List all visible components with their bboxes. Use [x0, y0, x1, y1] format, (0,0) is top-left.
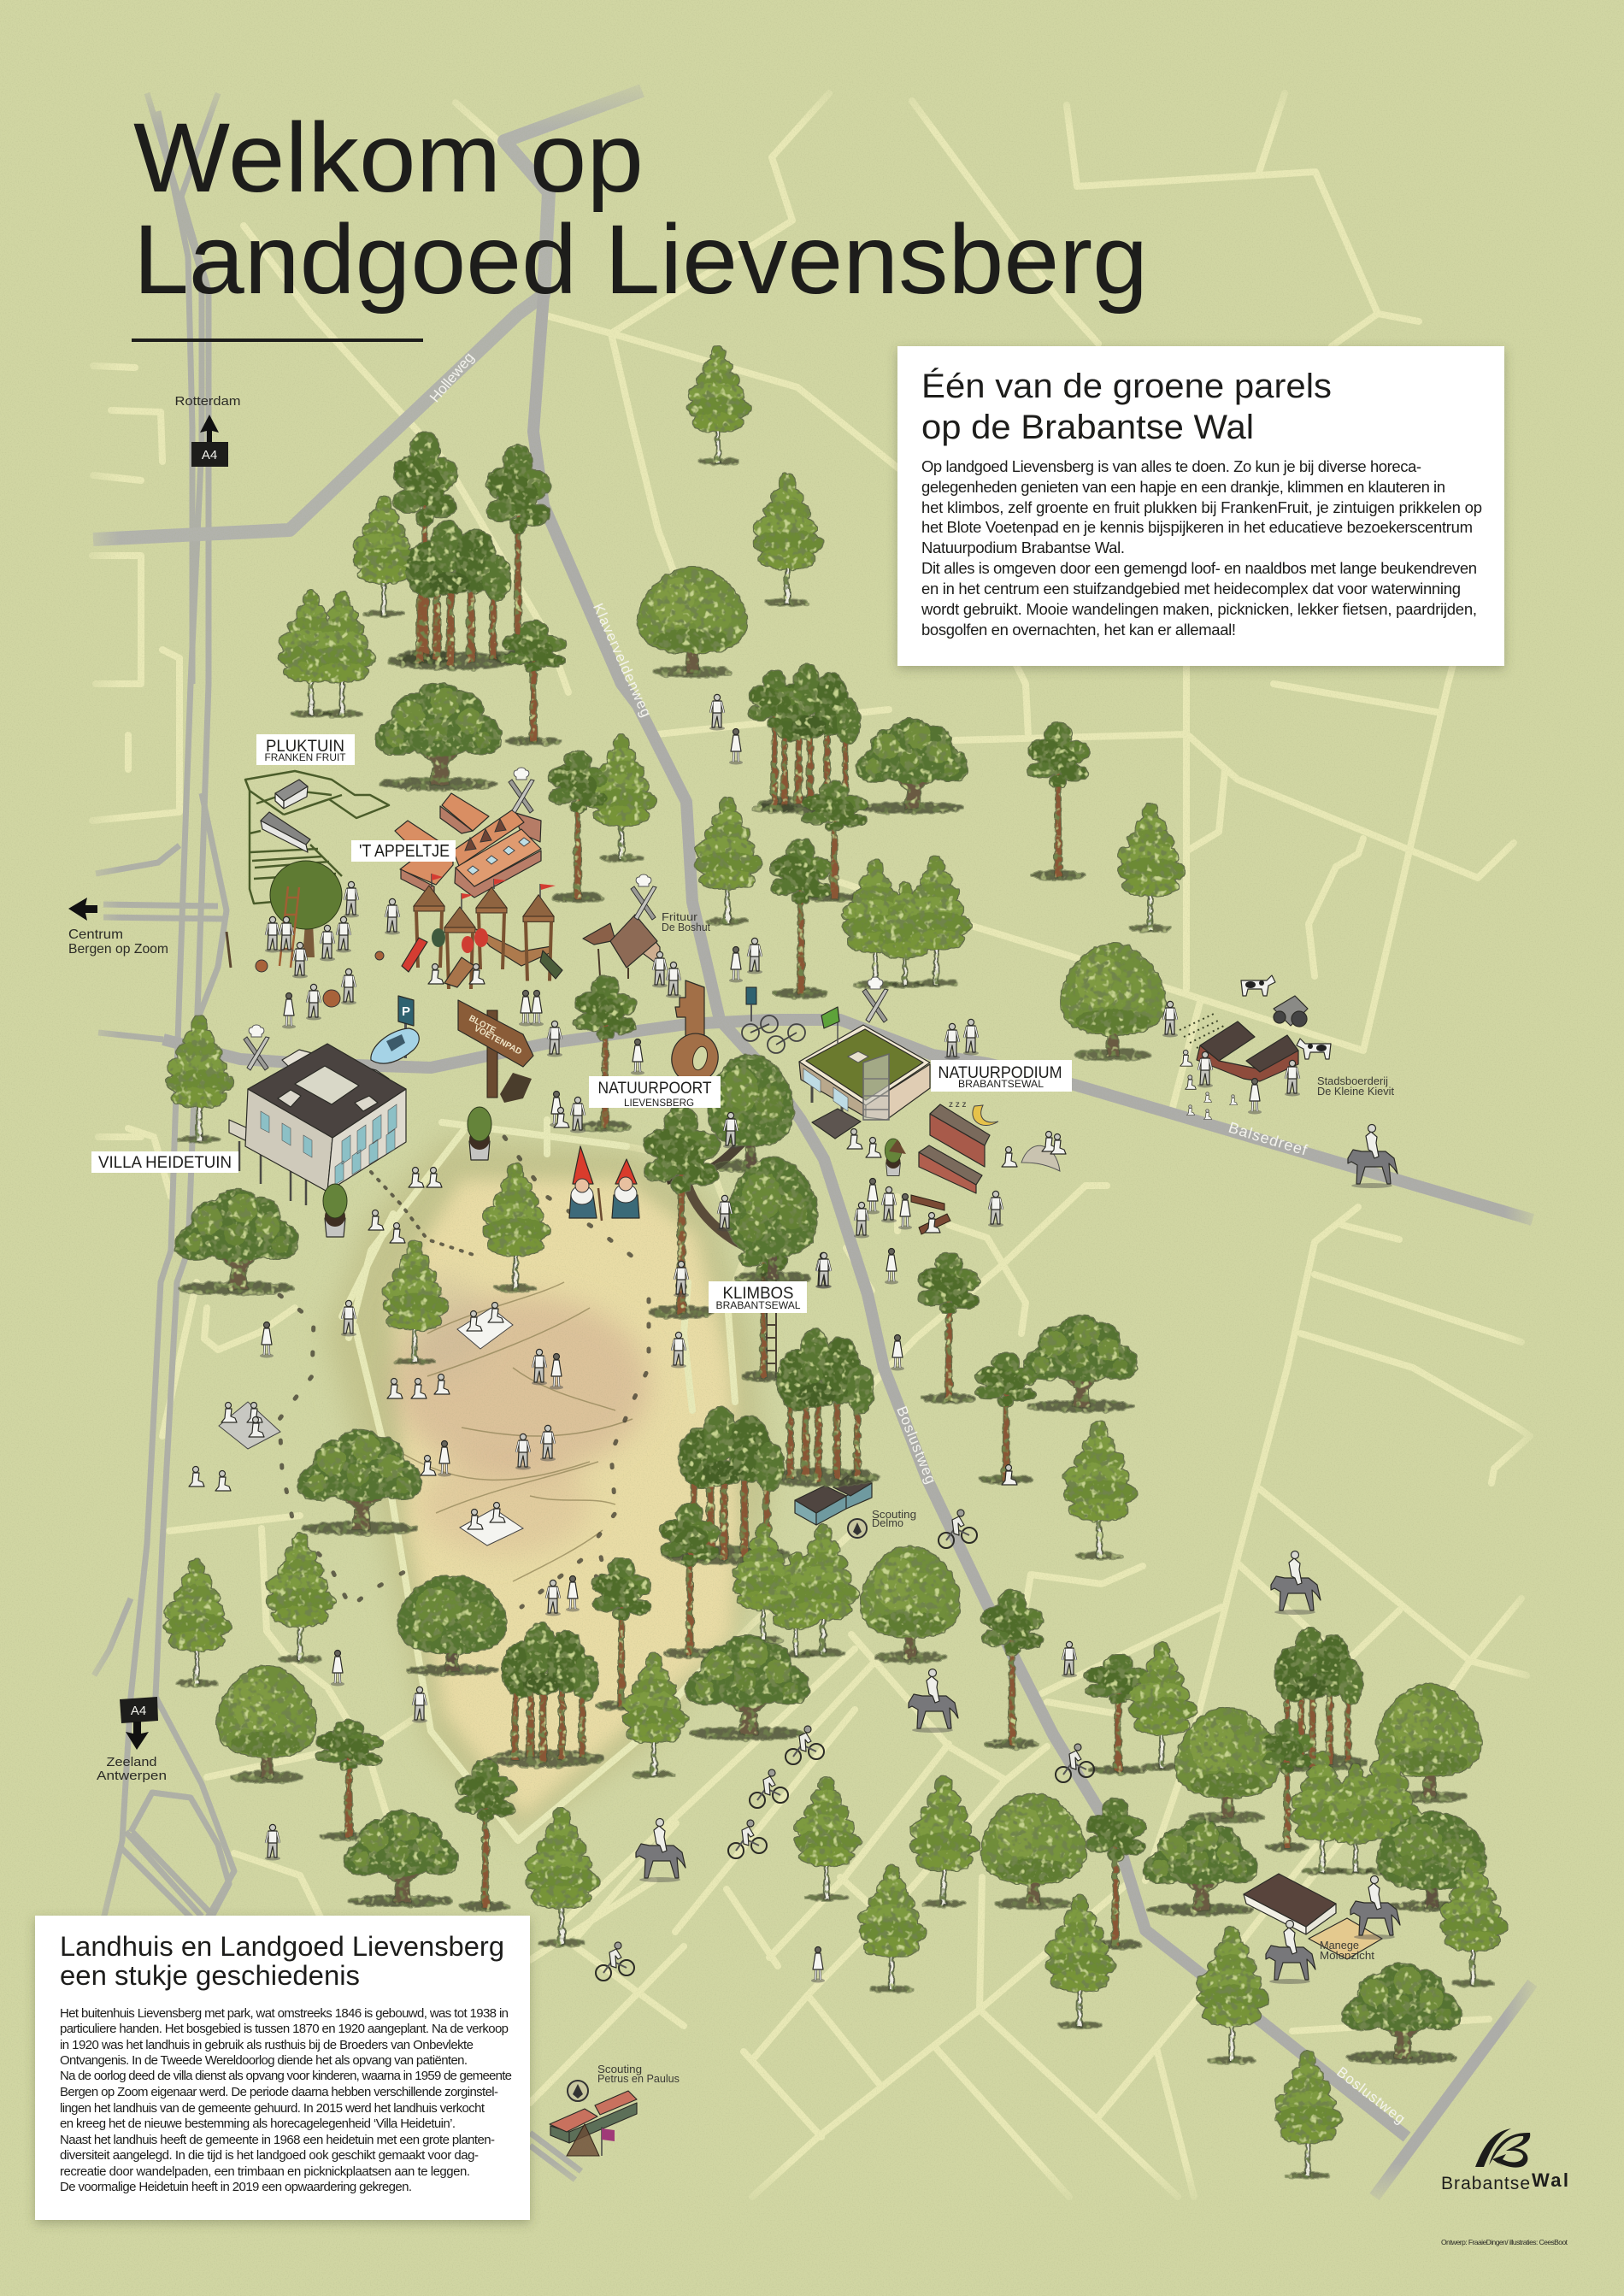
label: Klimbos: KLIMBOS [723, 1285, 793, 1303]
label: Klimbos: BRABANTSEWAL [716, 1301, 801, 1311]
direction: Rotterdam A4: A4 [202, 448, 217, 462]
small place names: Stadsboerderij [1317, 1074, 1388, 1087]
panel body text: gelegenheden genieten van een hapje en een drankje, klimmen en klauteren in [921, 478, 1445, 496]
apple tree with ladder and baskets [227, 861, 384, 1007]
panel body text: particuliere handen. Het bosgebied is tussen 1870 en 1920 aangeplant. Na de verkoop [60, 2022, 509, 2036]
label: Pluktuin [256, 734, 355, 765]
panel body text: Op landgoed Lievensberg is van alles te doen. Zo kun je bij diverse horeca- [921, 457, 1421, 475]
frituur De Boshut [583, 915, 660, 979]
picnic blankets [219, 1308, 523, 1545]
scouting Petrus en Paulus [550, 2091, 637, 2156]
small place names: Manege [1320, 1939, 1359, 1952]
small place names: Frituur [662, 910, 698, 923]
road names [427, 350, 1409, 2128]
footprints [279, 1137, 649, 1607]
direction: Centrum Bergen op Zoom: Bergen op Zoom [68, 942, 168, 957]
panel body text: diversiteit aangelegd. In die tijd is het landgoed ook geschikt gemaakt voor dag- [60, 2148, 479, 2163]
panel body text: Naast het landhuis heeft de gemeente in 1968 een heidetuin met een grote planten- [60, 2133, 495, 2147]
label: 't Appeltje: 'T APPELTJE [359, 842, 450, 861]
title: Welkom op [133, 103, 644, 213]
trees: around villa and klimbos [167, 976, 1137, 1412]
panel: Één van de groene parels [897, 346, 1504, 666]
road names: Boslustweg [893, 1404, 939, 1487]
cyclists [596, 1510, 1094, 1981]
small place names: De Boshut [662, 921, 710, 933]
road names: Boslustweg [1333, 2063, 1409, 2128]
potted topiaries [323, 1107, 902, 1237]
panel body text: De voormalige Heidetuin heeft in 2019 een opwaardering gekregen. [60, 2180, 412, 2194]
label: Natuurpoort [589, 1076, 721, 1109]
restaurant icons: fork, knife and chef hat [244, 768, 888, 1070]
road names: Balsedreef [1227, 1119, 1310, 1159]
direction: Centrum Bergen op Zoom: Centrum [68, 927, 123, 942]
scouting Delmo building [795, 1470, 872, 1525]
panel body text: in 1920 was het landhuis in gebruik als rusthuis bij de Broeders van Onbevlekte [60, 2038, 474, 2052]
small place names: Scouting [872, 1508, 916, 1521]
panel body text: Natuurpodium Brabantse Wal. [921, 539, 1125, 556]
title: Landgoed Lievensberg [133, 205, 1148, 315]
label: Natuurpoort: LIEVENSBERG [624, 1098, 694, 1109]
key sculpture Natuurpoort [666, 980, 724, 1088]
trees: north woodland [279, 346, 823, 790]
panel body text: Het buitenhuis Lievensberg met park, wat omstreeks 1846 is gebouwd, was tot 1938 in [60, 2006, 509, 2021]
title [133, 103, 1148, 315]
horse riders [636, 1125, 1400, 1984]
signpost Blote Voetenpad [458, 1000, 533, 1103]
panel heading [60, 1931, 504, 1991]
panel body text [60, 2006, 512, 2194]
trees [164, 346, 1508, 2179]
panel heading: een stukje geschiedenis [60, 1960, 360, 1991]
panel body text: Na de oorlog deed de villa dienst als opvang voor kinderen, waarna in 1959 de gemeente [60, 2069, 512, 2083]
direction: A4 Zeeland Antwerpen [97, 1697, 167, 1783]
signpost Blote Voetenpad: BLOTE [468, 1014, 497, 1036]
small place names: De Kleine Kievit [1317, 1085, 1394, 1098]
direction: Rotterdam A4 [174, 394, 241, 467]
farm animals [1180, 975, 1331, 1120]
direction: A4 Zeeland Antwerpen: Zeeland [106, 1755, 157, 1769]
restaurant 't Appeltje [395, 793, 541, 898]
panel body text: Bergen op Zoom eigenaar werd. De periode daarna hebben verschillende zorginstel- [60, 2085, 498, 2099]
direction: Centrum Bergen op Zoom [68, 898, 168, 957]
small place names: Delmo [872, 1516, 903, 1529]
panel: Landhuis en Landgoed Lievensberg [35, 1916, 530, 2220]
trees: heath and south forest [164, 1329, 1481, 1875]
panel body text: lingen het landhuis van de gemeente gehuurd. In 2015 werd het landhuis verkocht [60, 2101, 485, 2116]
signpost Blote Voetenpad: VOETENPAD [473, 1024, 523, 1057]
direction: A4 Zeeland Antwerpen: Antwerpen [97, 1769, 167, 1783]
panel body text: wordt gebruikt. Mooie wandelingen maken, picknicken, lekker fietsen, paardrijden, [921, 600, 1477, 618]
panel heading: Één van de groene parels [921, 367, 1332, 405]
wooden logs [911, 1195, 950, 1234]
trees: central forest [549, 665, 1186, 1060]
overnight huts: z z z [949, 1100, 967, 1110]
panel body text: het klimbos, zelf groente en fruit plukken bij FrankenFruit, je zintuigen prikkelen op [921, 498, 1482, 516]
scout badge Delmo [848, 1519, 867, 1538]
playground [402, 874, 562, 989]
panel body text: recreatie door wandelpaden, een trimbaan en picknickplaatsen aan te leggen. [60, 2164, 470, 2179]
label: Natuurpodium: BRABANTSEWAL [958, 1080, 1044, 1090]
panel body text [921, 457, 1482, 639]
overnight huts [919, 1100, 1060, 1193]
parking sign and blue car [371, 996, 419, 1063]
visitors on foot [189, 694, 1300, 1983]
pluktuin fields [245, 771, 389, 904]
panel body text: het Blote Voetenpad en je kennis bijspijkeren in het educatieve bezoekerscentrum [921, 518, 1473, 536]
logo: Brabantse Wal [1441, 2128, 1568, 2193]
natuurpodium building [799, 1007, 930, 1154]
small place names [597, 910, 1394, 2085]
label: Natuurpoort: NATUURPOORT [598, 1080, 712, 1098]
panel heading [921, 367, 1332, 446]
label: Villa Heidetuin: VILLA HEIDETUIN [98, 1154, 232, 1172]
credits: Ontwerp: FraaieDingen/ illustraties: CeesBoot [1441, 2238, 1568, 2246]
small place names: Scouting [597, 2063, 642, 2075]
logo: Brabantse Wal: Brabantse [1441, 2174, 1530, 2193]
scout badge Petrus en Paulus [568, 2081, 588, 2101]
klimbos rope bridges [667, 1141, 782, 1378]
label: Natuurpodium: NATUURPODIUM [939, 1064, 1062, 1082]
label: Natuurpodium [931, 1060, 1072, 1092]
small place names: Molenzicht [1320, 1949, 1374, 1962]
panel heading: op de Brabantse Wal [921, 409, 1254, 446]
villa Heidetuin [229, 1044, 406, 1205]
title rule [132, 339, 423, 342]
label: Pluktuin: PLUKTUIN [266, 738, 344, 756]
road names: Klaverveldenweg [590, 601, 655, 721]
trees: southern fields [344, 1760, 1508, 2179]
direction: A4 Zeeland Antwerpen: A4 [131, 1704, 146, 1718]
panel body text: bosgolfen en overnachten, het kan er allemaal! [921, 621, 1236, 639]
heath and sand area [325, 1120, 769, 1840]
farm tractor [1274, 996, 1308, 1027]
label: Klimbos [709, 1281, 807, 1313]
direction: Rotterdam A4: Rotterdam [174, 394, 241, 409]
manege Molenzicht [1244, 1874, 1382, 1959]
bicycle rack [742, 1016, 805, 1053]
panel body text: Dit alles is omgeven door een gemengd loof- en naaldbos met lange beukendreven [921, 559, 1477, 577]
info sign near bicycles [746, 987, 756, 1021]
pluktuin buildings [261, 780, 310, 852]
parking sign and blue car: P [402, 1004, 410, 1019]
stadsboerderij De Kleine Kievit [1180, 1014, 1298, 1081]
small place names: Petrus en Paulus [597, 2072, 680, 2085]
logo: Brabantse Wal: Wal [1532, 2169, 1568, 2191]
road names: Holleweg [427, 350, 478, 405]
panel body text: en kreeg het de nieuwe bestemming als horecagelegenheid ‘Villa Heidetuin’. [60, 2116, 456, 2131]
panel heading: Landhuis en Landgoed Lievensberg [60, 1931, 504, 1962]
panel body text: en in het centrum een stuifzandgebied met heidecomplex dat voor waterwinning [921, 580, 1461, 598]
panel body text: Ontvangenis. In de Tweede Wereldoorlog diende het als opvang van patiënten. [60, 2053, 468, 2068]
label: Pluktuin: FRANKEN FRUIT [265, 753, 345, 763]
gnomes [569, 1146, 639, 1221]
